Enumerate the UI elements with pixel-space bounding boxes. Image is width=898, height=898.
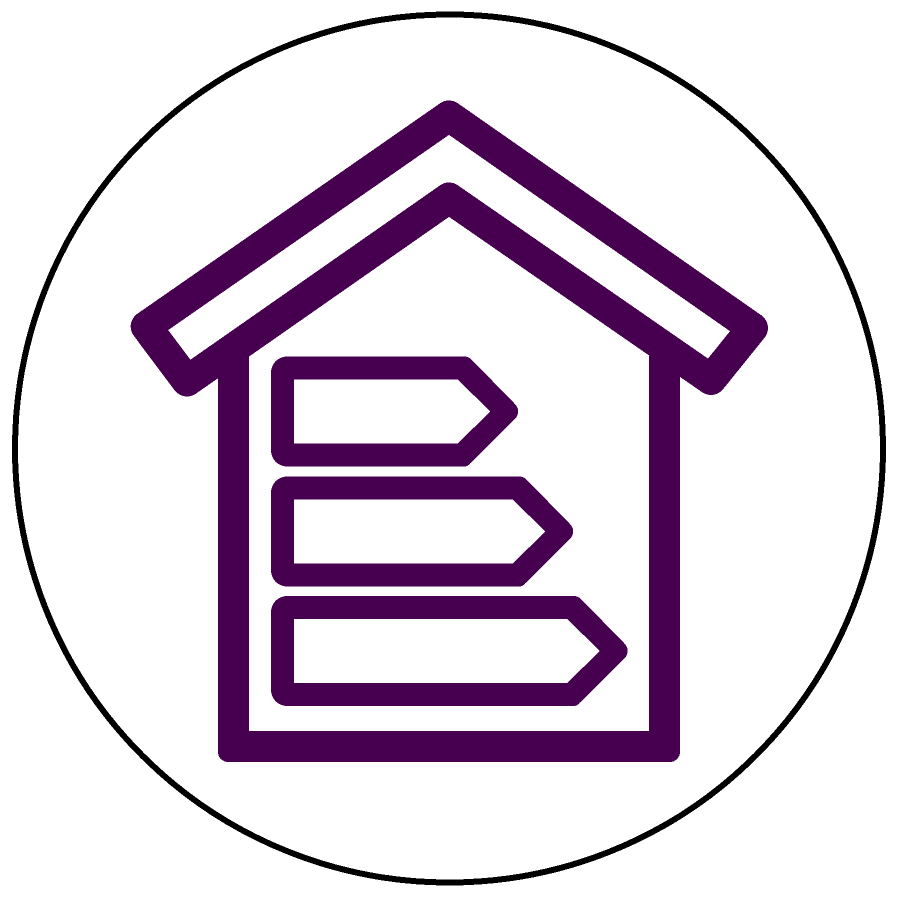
roof (146, 116, 752, 381)
energy bar: bottom (271, 596, 628, 706)
energy bar: middle (271, 476, 573, 586)
energy bar: top (271, 356, 518, 466)
icon: house (146, 116, 752, 762)
house walls (218, 335, 680, 762)
